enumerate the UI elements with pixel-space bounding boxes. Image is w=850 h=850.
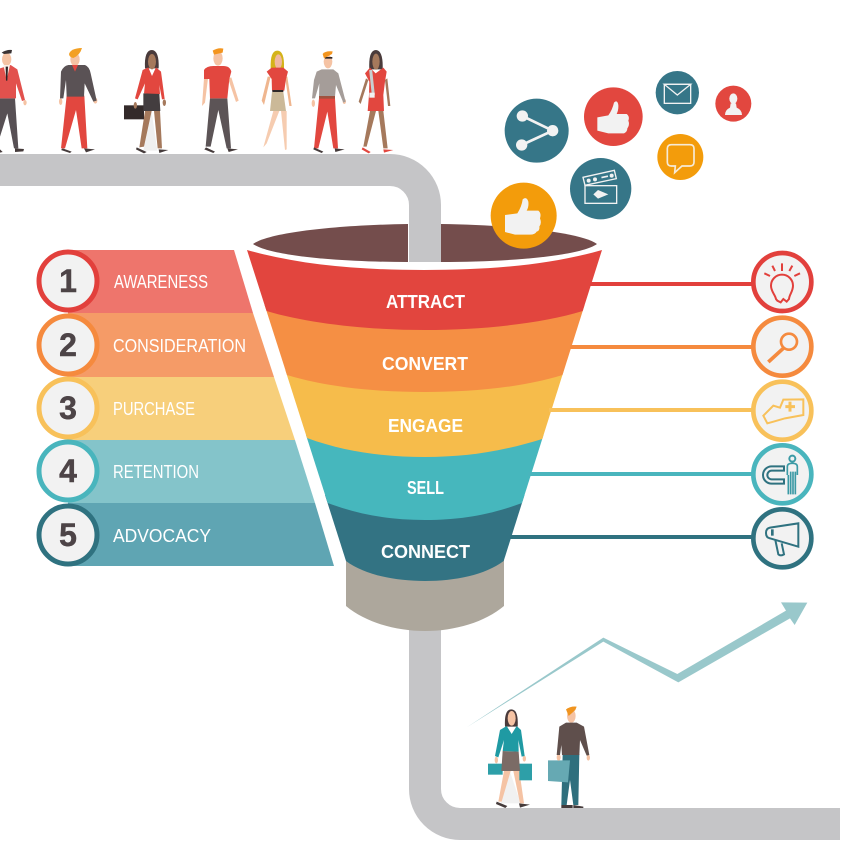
number badge 2: 2 [59,327,77,363]
stage: attract [247,250,602,330]
number badge 2 [39,316,97,374]
icon: megaphone [753,509,811,567]
social icons rising above funnel [505,71,751,219]
right icon column [753,253,811,567]
banner 1 awareness: AWARENESS [114,272,208,292]
icon: magnet and person [753,445,811,503]
number badge 1 [39,252,97,310]
funnel base [346,550,504,631]
person 7 with red dress [359,50,393,153]
banner 2 consideration [68,313,274,377]
man with shopping bag [548,707,590,808]
icon: hand with medical card [753,382,811,440]
stage labels [381,292,470,562]
connector lines from funnel to icons [510,284,755,537]
funnel with five stages [247,250,602,631]
number badge 3 [39,379,97,437]
icon: chat bubble [657,134,703,180]
person 1 [0,50,27,153]
number badge 4: 4 [59,453,77,489]
number badge 5 [39,506,97,564]
banner 4 retention: RETENTION [113,462,199,482]
banner 4 retention [68,440,315,503]
icon: share [505,99,569,163]
arrow: growth trend [467,602,807,727]
stage: connect [325,495,524,581]
icon: light bulb [753,253,811,311]
person 6 with sunglasses [312,51,346,153]
banner 5 advocacy [68,503,334,566]
icon: magnifying glass [753,318,811,376]
stage labels: ATTRACT [386,292,465,312]
stage: engage [285,370,564,457]
number badge 1: 1 [59,263,77,299]
number badge 5: 5 [59,517,77,553]
stage labels: CONVERT [382,354,468,374]
stage: sell [306,435,544,520]
icon: mail [656,71,699,114]
banner 1 awareness [68,250,253,313]
person 2 [59,48,97,153]
people on bottom pipe [488,707,590,808]
banner 3 purchase [68,377,295,440]
person 3 with briefcase [124,50,168,153]
stage: convert [265,305,585,392]
banner 5 advocacy: ADVOCACY [113,526,211,546]
icon: red thumbs up [584,87,643,146]
left banners: customer journey [39,250,334,566]
woman with teal top [488,709,532,808]
person 5 [262,51,292,150]
pipe: top entering funnel [0,170,425,262]
stage labels: SELL [407,478,444,498]
banner 3 purchase: PURCHASE [113,399,195,419]
number badge 4 [39,442,97,500]
icon: red user [715,86,751,122]
pipe: bottom leaving funnel [425,625,840,824]
icon: orange thumbs up at funnel mouth [491,183,557,249]
number badge 3: 3 [59,390,77,426]
icon: video clapper [570,158,631,219]
person 4 [202,48,239,153]
stage labels: ENGAGE [388,416,463,436]
people walking on top pipe [0,48,393,153]
banner 2 consideration: CONSIDERATION [113,336,246,356]
stage labels: CONNECT [381,542,470,562]
funnel mouth [253,224,597,262]
